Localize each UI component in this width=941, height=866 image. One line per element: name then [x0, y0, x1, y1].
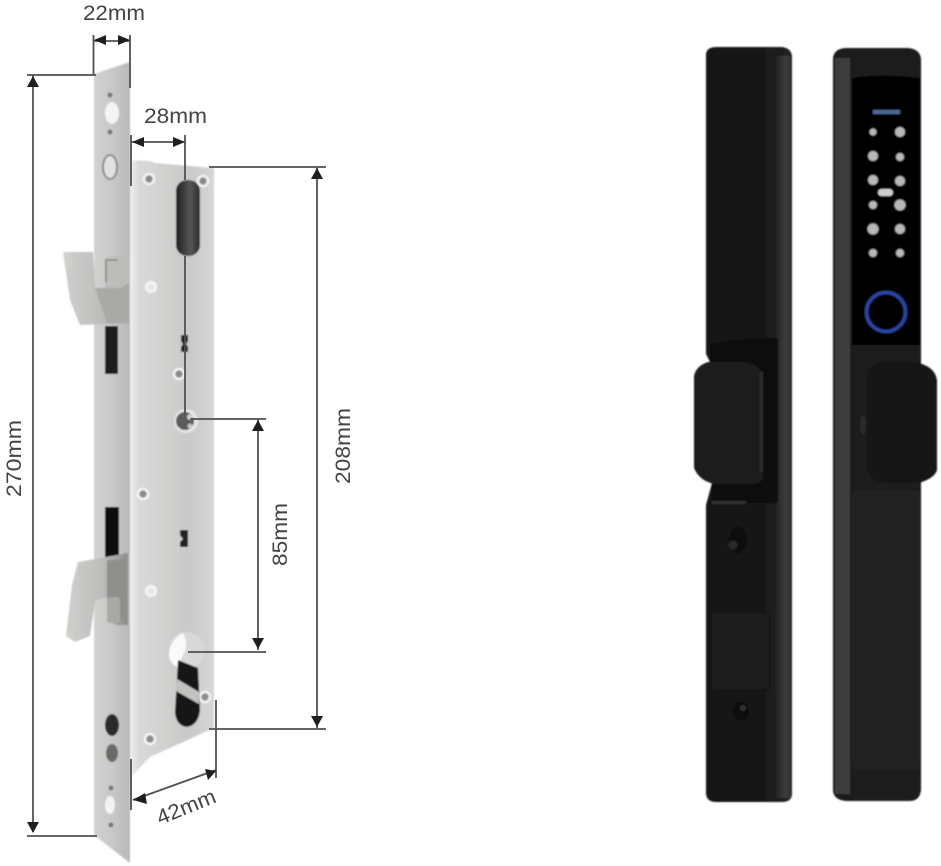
label: 208mm: 208mm	[332, 408, 355, 484]
front handle	[867, 362, 937, 483]
lower bolt slot	[105, 507, 119, 562]
top oval slot	[176, 180, 200, 256]
label: 42mm: 42mm	[153, 785, 219, 830]
rear upper screw	[728, 527, 747, 553]
rear cover plate	[711, 612, 770, 690]
rear recess lower highlight	[712, 501, 746, 504]
label: 28mm: 28mm	[144, 105, 207, 128]
cylinder cutout	[169, 632, 205, 727]
side latch oval	[860, 415, 866, 435]
front body	[833, 48, 921, 801]
fingerprint ring	[866, 292, 906, 332]
spindle hole	[174, 409, 198, 433]
rear body	[706, 47, 792, 802]
dimension lines	[27, 35, 326, 836]
faceplate screw holes top	[103, 92, 119, 179]
dimension arrowheads	[27, 35, 323, 833]
dimension: 208mm lines	[209, 167, 326, 729]
dimension: 22mm lines	[94, 35, 130, 88]
faceplate holes bottom	[105, 714, 119, 828]
mortise lock drawing	[63, 62, 214, 863]
dimension: 85mm lines	[188, 419, 266, 652]
rear handle	[694, 362, 763, 484]
lock body	[130, 160, 214, 778]
smart lock, front view	[833, 48, 937, 801]
label: 85mm: 85mm	[269, 503, 292, 566]
keypad keys	[868, 127, 906, 257]
small notch lower	[180, 530, 188, 547]
dimension: 270mm lines	[27, 75, 97, 836]
dimension: 42mm lines	[131, 700, 216, 810]
label: 270mm: 270mm	[3, 420, 26, 497]
lower hook bolt	[66, 553, 128, 642]
front lower pad	[852, 490, 920, 770]
small notch upper	[181, 335, 188, 352]
upper bolt slot	[105, 326, 118, 374]
dimension: 28mm lines	[131, 135, 185, 415]
upper hook bolt	[63, 252, 129, 325]
rear highlight strip	[776, 56, 791, 798]
body rivets	[146, 282, 156, 596]
indicator bar	[873, 110, 900, 114]
rear recess	[710, 338, 778, 503]
rear handle edge	[760, 372, 763, 472]
rear lower screw	[733, 702, 749, 720]
front side strip	[835, 58, 850, 794]
smart lock, rear view	[694, 47, 792, 802]
faceplate	[94, 62, 130, 863]
body screws	[138, 174, 210, 744]
keypad panel	[852, 76, 920, 345]
label: 22mm: 22mm	[83, 2, 145, 25]
